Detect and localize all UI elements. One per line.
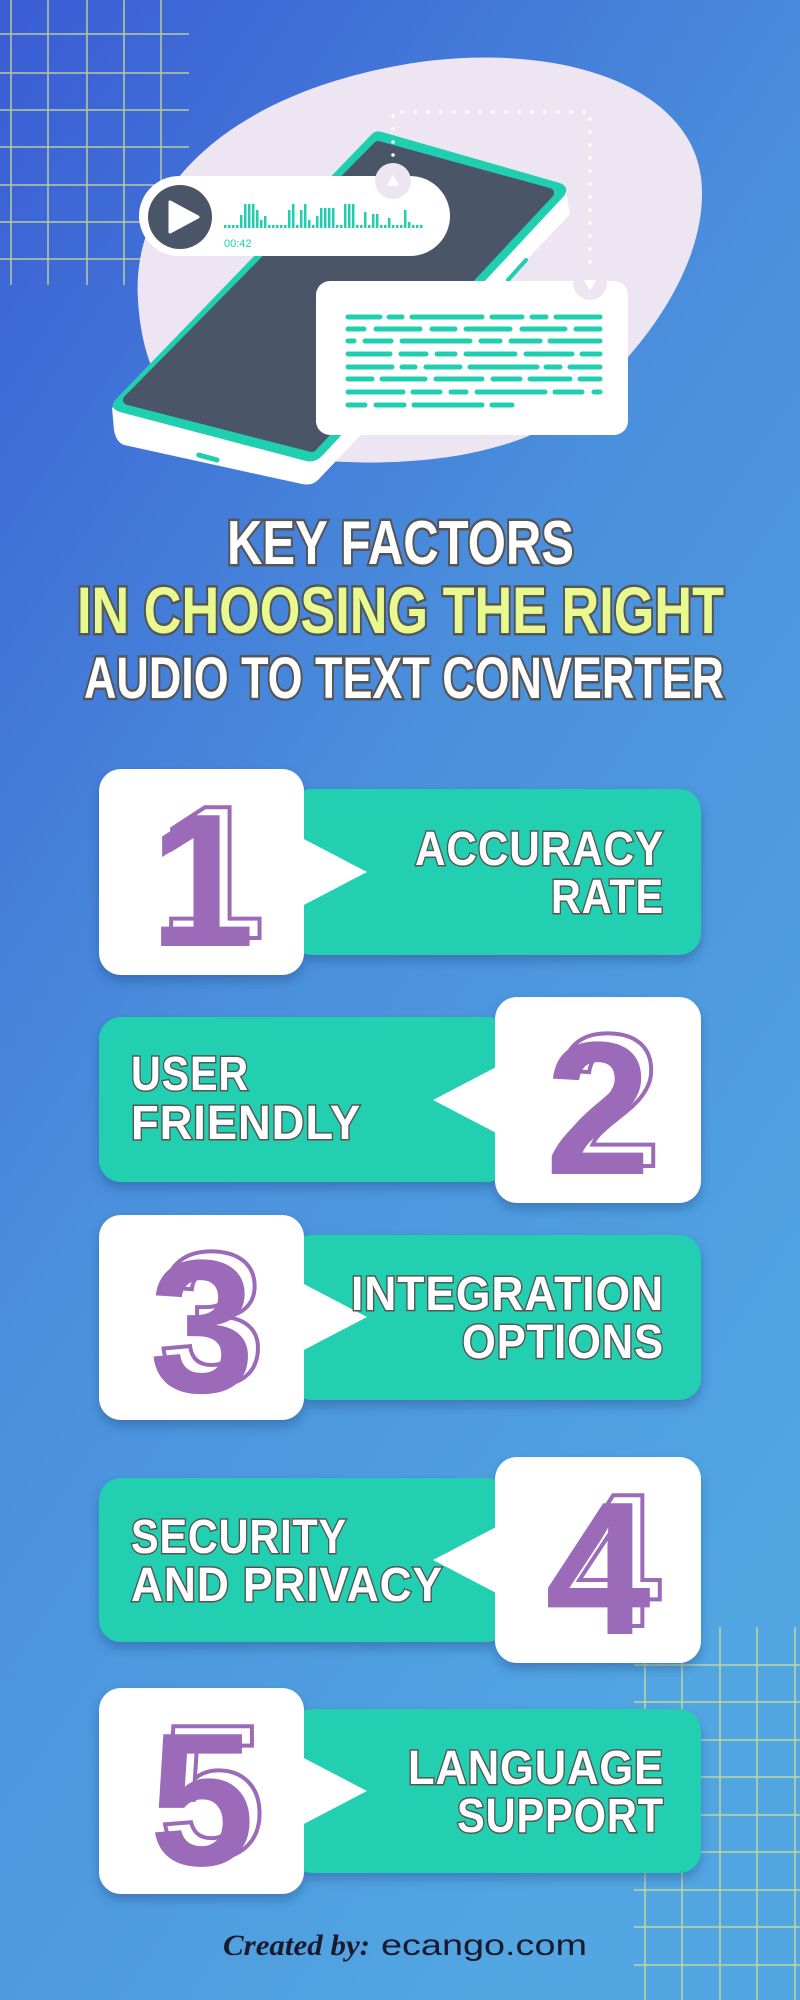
card 2: user friendly: USER bbox=[131, 1048, 249, 1101]
audio bubble bbox=[139, 163, 450, 256]
card 1: accuracy rate: ACCURACY bbox=[415, 823, 664, 876]
card 1: accuracy rate: RATE bbox=[551, 871, 664, 924]
card 4: security and privacy bbox=[99, 1455, 701, 1675]
card 5: language support: SUPPORT bbox=[457, 1790, 664, 1843]
footer credit: ecango.com bbox=[381, 1929, 587, 1962]
card 3: integration options bbox=[99, 1213, 701, 1433]
number 1: 1 bbox=[149, 775, 255, 987]
footer credit: Created by: bbox=[223, 1929, 370, 1962]
number 3: 3 bbox=[159, 1213, 265, 1425]
card 3: integration options: OPTIONS bbox=[462, 1316, 664, 1369]
number 2: 2 bbox=[545, 1003, 651, 1215]
audio bubble: 00:42 bbox=[224, 238, 252, 250]
number 1: 1 bbox=[159, 767, 265, 979]
card 5: language support bbox=[99, 1686, 701, 1906]
illustration: phone with speech to text bbox=[112, 58, 702, 484]
number 4: 4 bbox=[545, 1463, 651, 1675]
card 2: user friendly: FRIENDLY bbox=[131, 1097, 361, 1150]
grid bottom-right bbox=[634, 1627, 800, 2000]
blob background bbox=[138, 58, 702, 462]
number 4: 4 bbox=[555, 1455, 661, 1667]
number 5: 5 bbox=[159, 1686, 265, 1898]
title bbox=[77, 509, 724, 711]
card 5: language support: LANGUAGE bbox=[408, 1742, 664, 1795]
card 4: security and privacy: SECURITY bbox=[131, 1511, 347, 1564]
card 2: user friendly bbox=[99, 995, 701, 1215]
card 1: accuracy rate bbox=[99, 767, 701, 987]
card 4: security and privacy: AND PRIVACY bbox=[131, 1559, 443, 1612]
number 5: 5 bbox=[149, 1694, 255, 1906]
dotted path arrow bbox=[393, 112, 590, 280]
title: KEY FACTORS bbox=[227, 509, 574, 578]
text bubble bbox=[316, 266, 628, 435]
footer credit bbox=[223, 1929, 587, 1962]
grid top-left bbox=[0, 0, 189, 285]
icon: phone bbox=[112, 131, 570, 485]
number 3: 3 bbox=[149, 1221, 255, 1433]
card 3: integration options: INTEGRATION bbox=[351, 1268, 664, 1321]
number 2: 2 bbox=[555, 995, 661, 1207]
